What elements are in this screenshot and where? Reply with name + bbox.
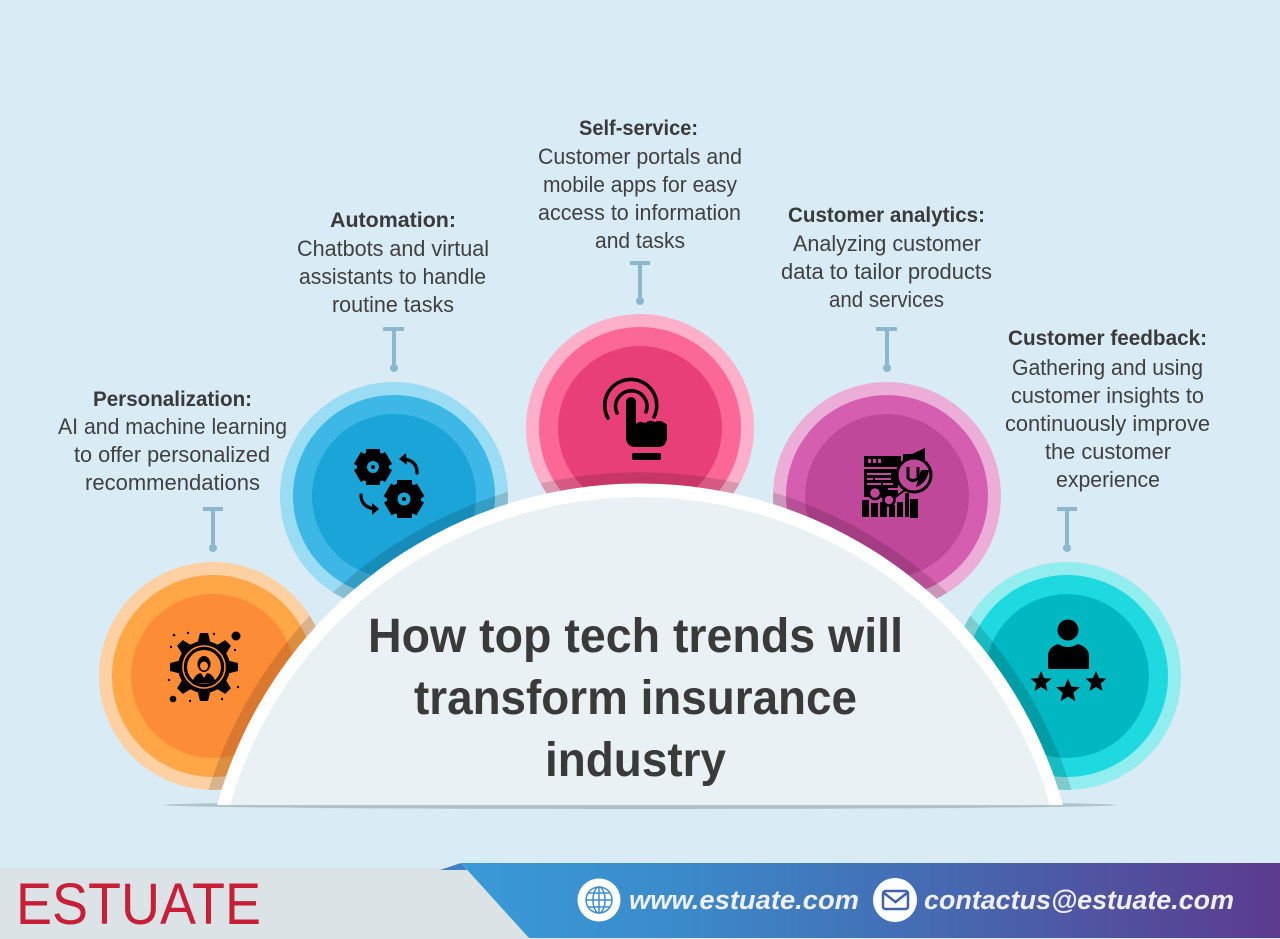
connector: customer feedback [1057, 507, 1077, 552]
title: How top tech trends will [368, 610, 903, 663]
text block: personalization: Personalization: [93, 388, 252, 411]
connector: self-service [630, 261, 650, 305]
footer gradient banner [440, 863, 1280, 938]
text block: automation: routine tasks [332, 292, 454, 317]
text block: self-service: and tasks [595, 228, 685, 253]
text block: automation: Chatbots and virtual [297, 236, 489, 261]
connector: automation [383, 327, 404, 372]
title: industry [545, 734, 726, 787]
central dome [217, 483, 1063, 805]
text block: customer feedback: Gathering and using [1012, 355, 1203, 380]
icon: person with stars [1031, 620, 1106, 701]
icon: gears and arrows [354, 449, 424, 518]
text block: personalization: to offer personalized [74, 442, 270, 467]
text block: customer feedback: experience [1056, 467, 1160, 492]
icon: globe [578, 878, 620, 922]
text block: self-service: Customer portals and [538, 144, 742, 169]
text block: customer analytics: and services [829, 287, 944, 312]
icon: mail [873, 878, 917, 922]
text block: customer feedback: continuously improve [1005, 411, 1210, 436]
text block: customer feedback: customer insights to [1011, 383, 1204, 408]
ground shadow [164, 801, 1116, 809]
text block: customer feedback: the customer [1045, 439, 1171, 464]
panel: personalization circle [99, 562, 327, 790]
panel: customer feedback circle [953, 562, 1181, 790]
panel: automation circle [280, 382, 508, 610]
logo: ESTUATE: ESTUATE [16, 872, 261, 937]
text block: customer feedback: Customer feedback: [1008, 327, 1207, 350]
text block: self-service: Self-service: [579, 117, 698, 140]
icon: gear with person [168, 632, 240, 702]
text block: self-service: mobile apps for easy [543, 172, 737, 197]
title [368, 610, 903, 787]
text block: automation: assistants to handle [299, 264, 486, 289]
dome shadow on circles [204, 472, 1076, 805]
panel: self-service circle [526, 314, 754, 542]
text block: personalization: AI and machine learning [58, 414, 287, 439]
text block: self-service [538, 117, 742, 253]
text block: customer analytics: Customer analytics: [788, 204, 985, 227]
footer left strip [0, 868, 530, 939]
text block: automation: Automation: [330, 209, 456, 232]
connector: personalization [203, 507, 223, 552]
panel: customer analytics circle [773, 382, 1001, 610]
text block: automation [297, 209, 489, 317]
text block: customer analytics [781, 204, 992, 312]
text block: customer analytics: Analyzing customer [793, 231, 981, 256]
website text: www.estuate.com [629, 885, 859, 915]
connector: customer analytics [876, 327, 897, 372]
text block: customer analytics: data to tailor products [781, 259, 992, 284]
text block: self-service: access to information [538, 200, 741, 225]
text block: personalization [58, 388, 287, 495]
text block: customer feedback [1005, 327, 1210, 492]
title: transform insurance [414, 672, 857, 725]
icon: touch hand [605, 379, 667, 460]
icon: analytics report [862, 448, 931, 518]
text block: personalization: recommendations [85, 470, 260, 495]
email text: contactus@estuate.com [924, 885, 1234, 915]
